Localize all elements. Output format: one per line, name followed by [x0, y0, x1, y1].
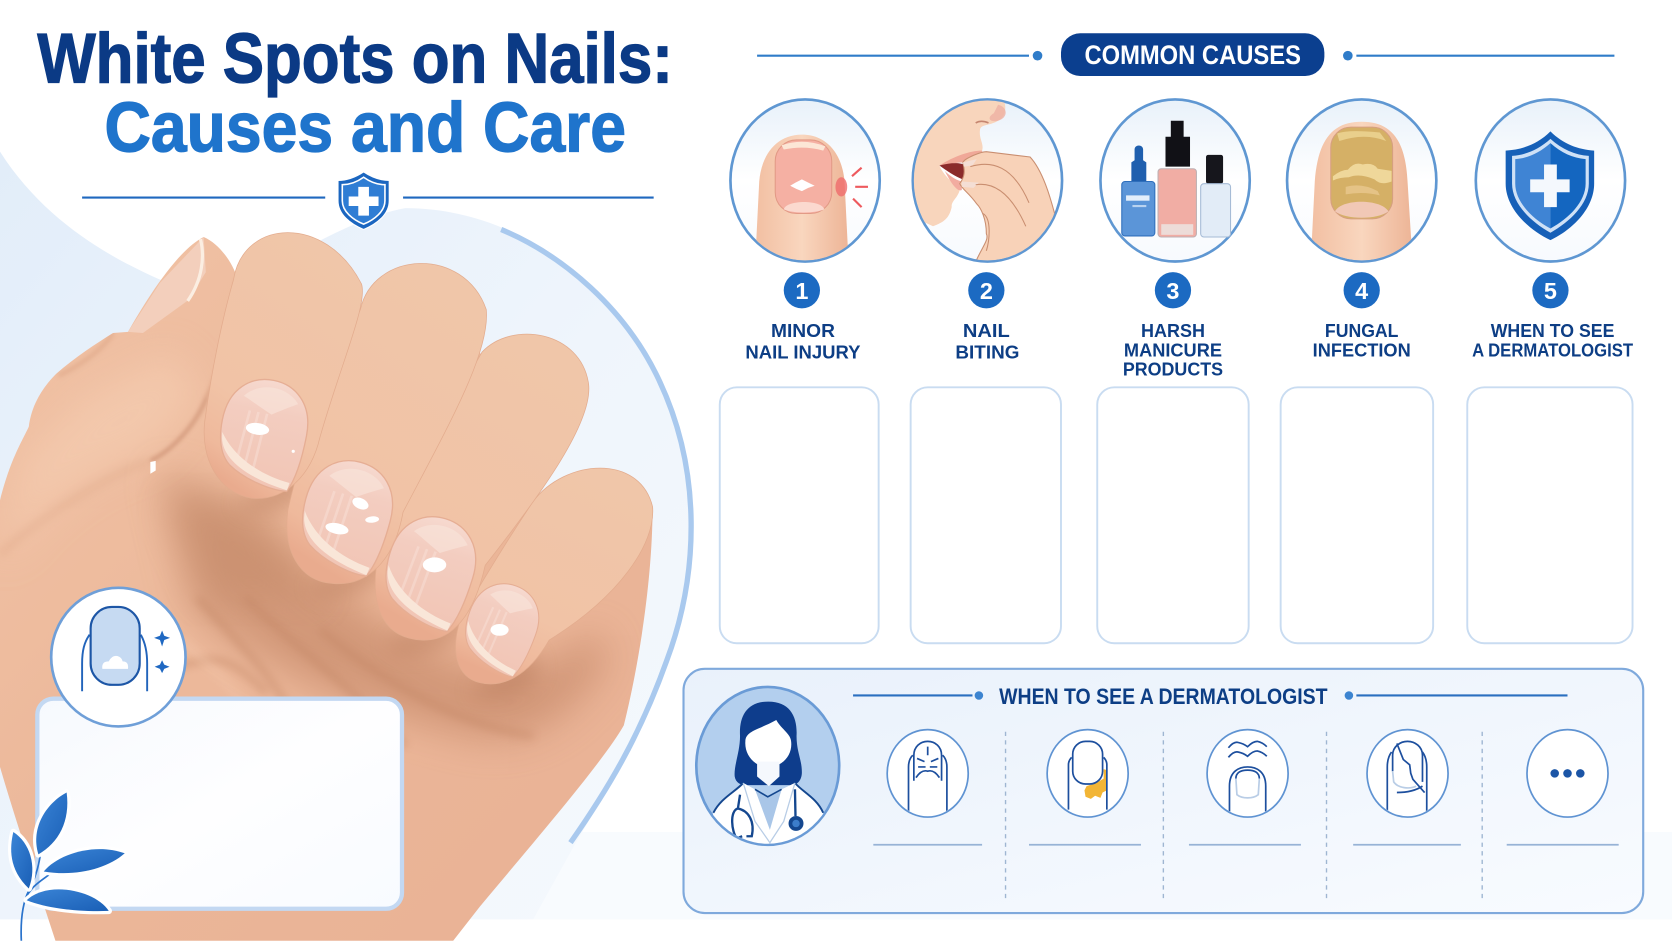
- cause labels: MINOR: [771, 320, 835, 341]
- cause labels: PRODUCTS: [1123, 359, 1223, 380]
- panel: when to see a dermatologist: [684, 669, 1643, 913]
- number badges: 5: [1544, 278, 1557, 304]
- nails: [211, 372, 549, 680]
- title: White Spots on Nails:: [37, 18, 673, 97]
- title: Causes and Care: [105, 88, 626, 167]
- number badges: 1: [795, 278, 808, 304]
- icon: fungal infection: [1287, 99, 1436, 267]
- cause labels: WHEN TO SEE: [1491, 320, 1614, 341]
- cause labels: INFECTION: [1313, 339, 1411, 360]
- middle finger: [287, 263, 487, 584]
- icon: shield with cross: [1476, 99, 1625, 262]
- white spots: [245, 421, 509, 636]
- title: [37, 18, 673, 167]
- hand photo illustration: [0, 233, 653, 941]
- icon: cracked nail: [1367, 730, 1448, 817]
- number badges: 3: [1166, 278, 1179, 304]
- icon: manicure products: [1100, 99, 1250, 262]
- heading: common causes: [757, 33, 1614, 76]
- finger shadows: [235, 448, 538, 696]
- heading: when to see a dermatologist: WHEN TO SEE A DERMATOLOGIST: [999, 684, 1328, 709]
- number badges: [784, 272, 1569, 308]
- icon: leaves: [11, 793, 125, 941]
- cause labels: MANICURE: [1124, 339, 1222, 360]
- pinky finger: [456, 468, 653, 684]
- icon: doctor: [696, 687, 839, 853]
- number badges: 4: [1355, 278, 1368, 304]
- icon: nail ridges: [887, 730, 968, 817]
- empty cause cards: [720, 387, 1633, 643]
- icon: nail with white spot: [51, 588, 186, 726]
- cause labels: BITING: [955, 342, 1019, 363]
- cause labels: HARSH: [1141, 320, 1205, 341]
- empty callout card: [37, 699, 402, 909]
- index finger: [204, 233, 362, 498]
- cause labels: NAIL: [963, 320, 1010, 341]
- icon: more (three dots): [1527, 730, 1608, 817]
- icon: nail biting: [906, 91, 1062, 267]
- cause labels: [745, 320, 1634, 380]
- icon: minor nail injury: [730, 99, 880, 267]
- ring finger: [375, 334, 589, 640]
- icon: nail waves: [1207, 730, 1288, 817]
- heading: common causes: COMMON CAUSES: [1084, 40, 1301, 70]
- heading: when to see a dermatologist: [853, 684, 1568, 709]
- icon: yellow nail discoloration: [1047, 730, 1128, 817]
- cause labels: NAIL INJURY: [745, 342, 861, 363]
- number badges: 2: [980, 278, 993, 304]
- cause labels: A DERMATOLOGIST: [1472, 339, 1634, 360]
- title divider with shield icon: [82, 172, 654, 230]
- cause labels: FUNGAL: [1325, 320, 1398, 341]
